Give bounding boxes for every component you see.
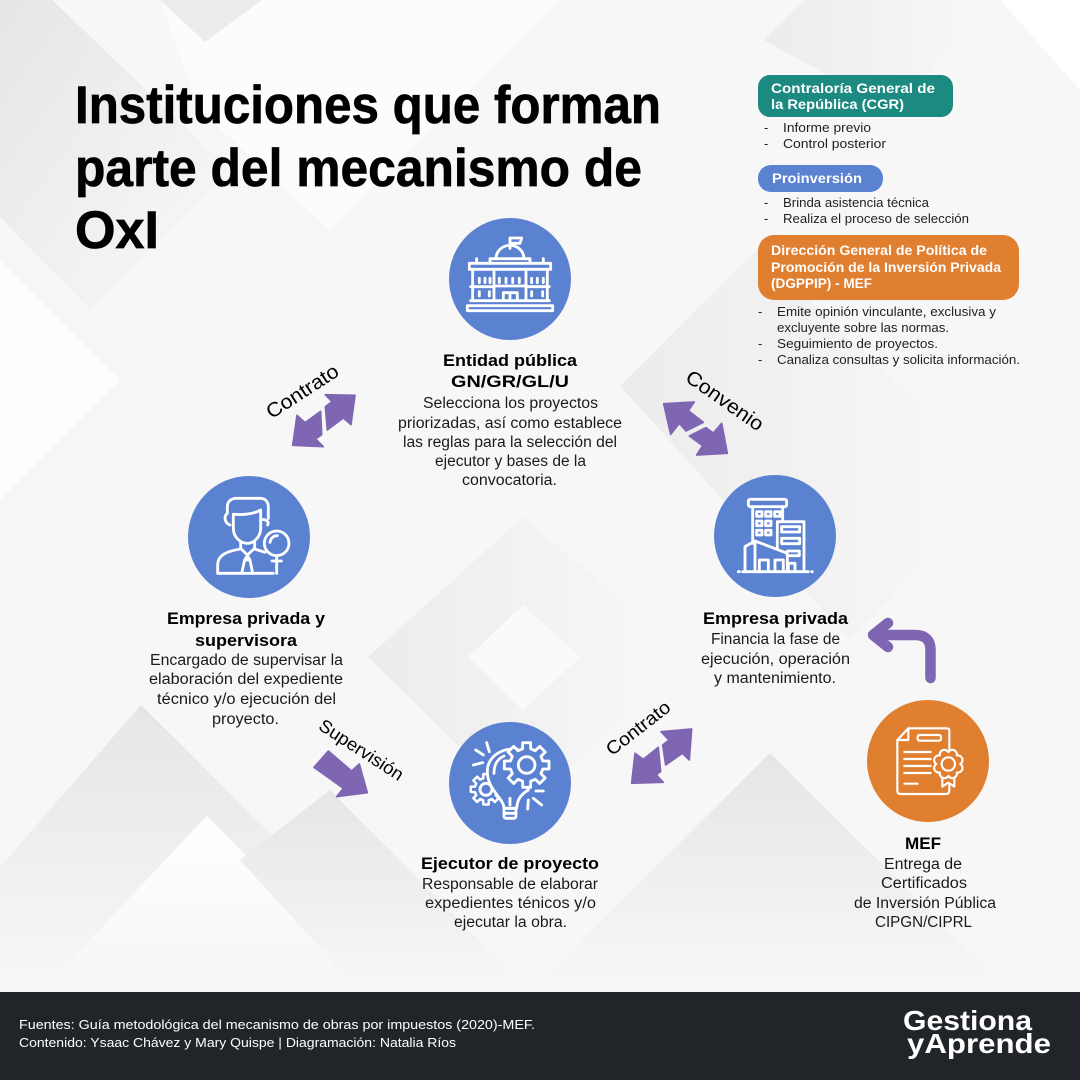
label: Entidad pública	[398, 351, 622, 489]
footer credits: Fuentes: Guía metodológica del mecanismo de obras por impuestos (2020)-MEF.	[19, 1017, 535, 1032]
list: Proinversión: -	[764, 195, 768, 210]
list: DGPPIP: -	[758, 304, 762, 319]
badge: Contraloría: Contraloría General de	[771, 81, 936, 96]
footer credits	[19, 1017, 535, 1050]
arrow: Contrato bottom	[602, 696, 692, 783]
title	[75, 76, 661, 260]
label: MEF	[854, 834, 996, 931]
arrow: Supervisión: Supervisión	[315, 715, 407, 785]
label: Ejecutor de proyecto: Ejecutor de proyecto	[421, 854, 599, 873]
arrow: Contrato bottom: Contrato	[602, 696, 674, 760]
badge: Proinversión	[758, 165, 883, 192]
icon: lightbulb and gears	[449, 722, 571, 844]
label: Empresa privada y supervisora: proyecto.	[212, 711, 279, 728]
list: DGPPIP	[758, 304, 1020, 367]
arrow: Contrato top left: Contrato	[262, 360, 343, 424]
label: Ejecutor de proyecto: Responsable de elaborar	[422, 876, 598, 893]
label: Entidad pública: ejecutor y bases de la	[435, 453, 586, 470]
label: Entidad pública: priorizadas, así como establece	[398, 415, 622, 432]
label: Entidad pública: las reglas para la selección del	[403, 434, 617, 451]
list: Contraloría: -	[764, 120, 768, 135]
badge: Contraloría: la República (CGR)	[771, 97, 904, 112]
badge: Contraloría	[758, 75, 953, 117]
arrow: Convenio	[664, 366, 768, 455]
arrow: MEF to Empresa privada	[873, 623, 930, 678]
badge: DGPPIP	[758, 235, 1019, 300]
icon: certificate	[867, 700, 989, 822]
label: Ejecutor de proyecto: ejecutar la obra.	[454, 914, 567, 931]
icon: supervisor	[188, 476, 310, 598]
list: DGPPIP: -	[758, 352, 762, 367]
logo: Gestiona y Aprende: Gestiona	[903, 1005, 1032, 1036]
arrow: Convenio: Convenio	[681, 366, 768, 436]
label: Empresa privada y supervisora: supervisora	[195, 631, 298, 650]
label: Ejecutor de proyecto: expedientes ténicos y/o	[425, 895, 596, 912]
badge: DGPPIP: Dirección General de Política de	[771, 243, 988, 258]
badge: DGPPIP: (DGPPIP) - MEF	[771, 276, 872, 291]
label: Empresa privada	[701, 609, 850, 687]
list: Proinversión: -	[764, 211, 768, 226]
title: Instituciones que forman	[75, 76, 661, 135]
list: Proinversión: Realiza el proceso de selección	[783, 211, 969, 226]
title: parte del mecanismo de	[75, 139, 642, 198]
label: Empresa privada: Empresa privada	[703, 609, 849, 628]
label: MEF: Entrega de	[884, 856, 962, 873]
list: Contraloría	[764, 120, 887, 151]
label: Entidad pública: Selecciona los proyectos	[423, 395, 598, 412]
footer credits: Contenido: Ysaac Chávez y Mary Quispe | Diagramación: Natalia Ríos	[19, 1035, 456, 1050]
list: Contraloría: Control posterior	[783, 136, 887, 151]
list: Proinversión: Brinda asistencia técnica	[783, 195, 930, 210]
label: Empresa privada y supervisora: técnico y/o ejecución del	[157, 691, 336, 708]
list: Proinversión	[764, 195, 969, 226]
label: MEF: de Inversión Pública	[854, 895, 996, 912]
list: DGPPIP: Emite opinión vinculante, exclusiva y	[777, 304, 997, 319]
label: Empresa privada: Financia la fase de	[711, 631, 840, 648]
label: MEF: Certificados	[881, 875, 967, 892]
title: OxI	[75, 201, 159, 260]
panel: Contraloría	[758, 75, 953, 151]
label: Entidad pública: Entidad pública	[443, 351, 578, 370]
label: Empresa privada: y mantenimiento.	[714, 670, 836, 687]
list: Contraloría: -	[764, 136, 768, 151]
label: Entidad pública: GN/GR/GL/U	[451, 372, 569, 391]
label: Empresa privada y supervisora	[149, 609, 343, 728]
icon: public building	[449, 218, 571, 340]
list: DGPPIP: Seguimiento de proyectos.	[777, 336, 938, 351]
label: Empresa privada: ejecución, operación	[701, 651, 850, 668]
list: DGPPIP: excluyente sobre las normas.	[777, 320, 949, 335]
badge: DGPPIP: Promoción de la Inversión Privada	[771, 260, 1002, 275]
label: MEF: CIPGN/CIPRL	[875, 914, 972, 931]
list: DGPPIP: -	[758, 336, 762, 351]
label: Entidad pública: convocatoria.	[462, 472, 557, 489]
icon: office buildings	[714, 475, 836, 597]
list: Contraloría: Informe previo	[783, 120, 871, 135]
badge: Proinversión: Proinversión	[772, 171, 862, 186]
panel: DGPPIP	[758, 235, 1020, 367]
label: Ejecutor de proyecto	[421, 854, 599, 931]
logo: Gestiona y Aprende: yAprende	[907, 1028, 1051, 1059]
label: Empresa privada y supervisora: Empresa privada y	[167, 609, 326, 628]
label: Empresa privada y supervisora: elaboración del expediente	[149, 671, 343, 688]
arrow: Contrato top left	[262, 360, 355, 447]
label: Empresa privada y supervisora: Encargado de supervisar la	[150, 652, 343, 669]
list: DGPPIP: Canaliza consultas y solicita información.	[777, 352, 1020, 367]
footer	[0, 992, 1080, 1080]
panel: Proinversión	[758, 165, 969, 226]
label: MEF: MEF	[905, 834, 941, 853]
logo: Gestiona y Aprende	[903, 1005, 1051, 1059]
